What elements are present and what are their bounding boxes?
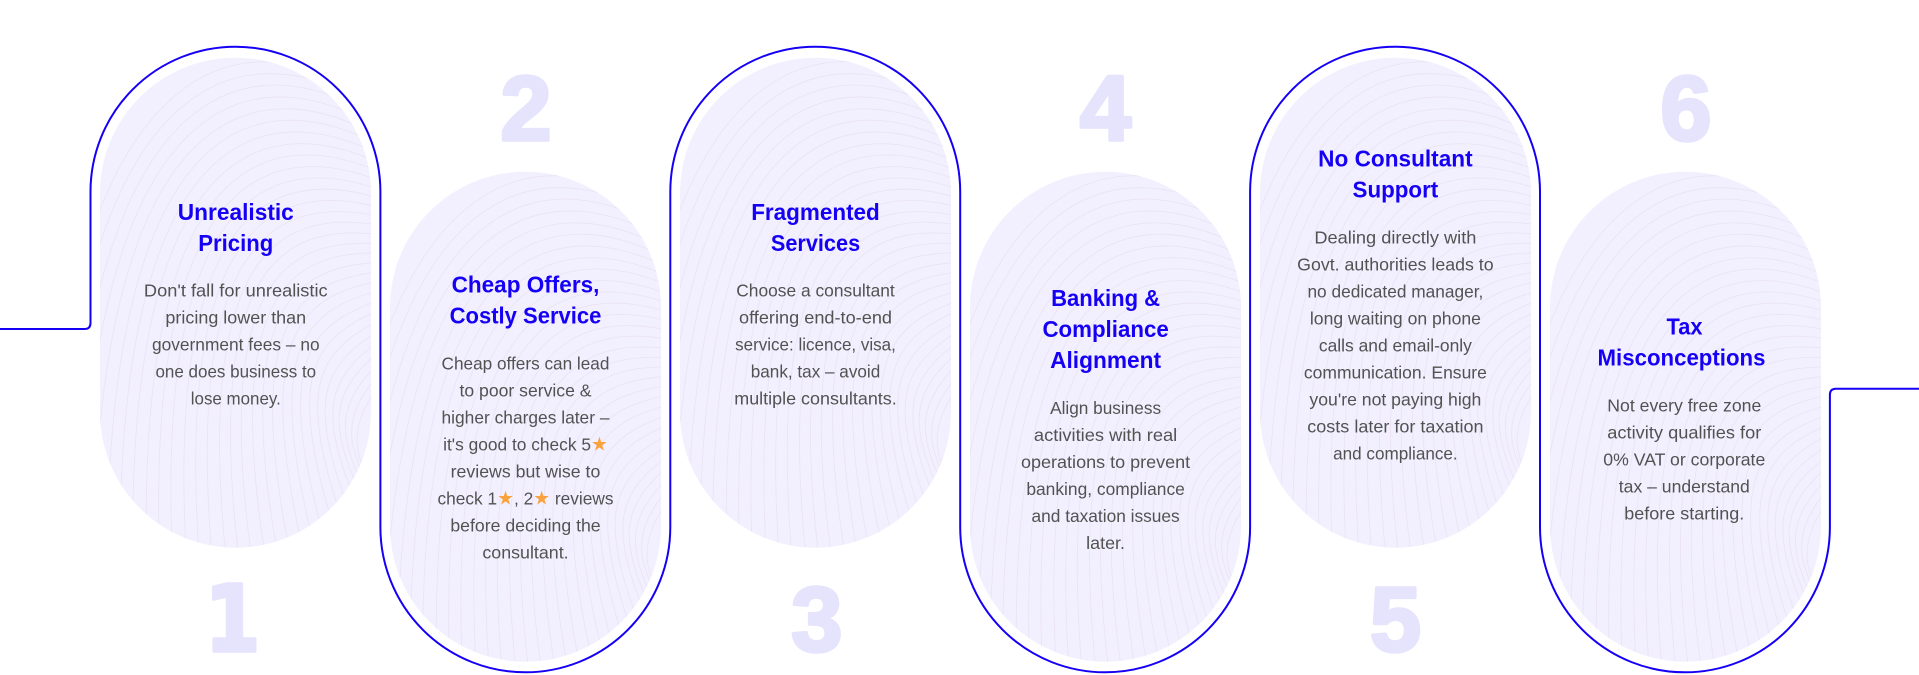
body text 4: and taxation issues — [1032, 506, 1180, 526]
body text 3: service: licence, visa, — [735, 335, 896, 355]
pill background 5 — [1260, 58, 1531, 548]
pill background 3 — [680, 58, 951, 548]
number 4: 4 — [1080, 58, 1131, 160]
body text 5: Govt. authorities leads to — [1297, 255, 1494, 275]
body text 5: no dedicated manager, — [1307, 282, 1483, 302]
body text 2: consultant. — [482, 543, 569, 563]
heading: banking and compliance alignment: Banking & — [1051, 285, 1160, 311]
heading: fragmented services — [751, 199, 880, 256]
heading: unrealistic pricing: Pricing — [198, 230, 273, 256]
body text 5: communication. Ensure — [1304, 363, 1487, 383]
panel: step 5 no consultant support — [1260, 58, 1531, 654]
body text 1: government fees – no — [152, 335, 320, 355]
body text 6: before starting. — [1624, 503, 1744, 523]
body text 4 — [1021, 398, 1190, 553]
body text 6: Not every free zone — [1607, 395, 1761, 415]
body text 5: costs later for taxation — [1307, 417, 1484, 437]
pill background 6 — [1550, 172, 1821, 662]
heading: unrealistic pricing: Unrealistic — [178, 199, 294, 225]
number 5: 5 — [1370, 569, 1421, 671]
panel: step 4 banking and compliance — [970, 74, 1241, 662]
body text 2: before deciding the — [450, 516, 601, 536]
heading: no consultant support: No Consultant — [1318, 146, 1473, 172]
body text 5: you're not paying high — [1309, 390, 1481, 410]
heading: no consultant support — [1318, 146, 1473, 203]
heading: cheap offers costly service: Cheap Offers, — [452, 272, 599, 298]
number 2: 2 — [500, 58, 552, 160]
body text 2: it's good to check 5★ — [443, 434, 608, 456]
body text 3: Choose a consultant — [736, 281, 895, 301]
body text 1: Don't fall for unrealistic — [144, 281, 328, 301]
heading: tax misconceptions: Tax — [1666, 313, 1703, 339]
body text 5: Dealing directly with — [1314, 228, 1476, 248]
body text 2: Cheap offers can lead — [442, 354, 609, 374]
pill background 2 — [390, 172, 661, 662]
heading: unrealistic pricing — [178, 199, 294, 256]
panel: step 2 cheap offers — [390, 74, 661, 662]
panel: step 6 tax misconceptions — [1550, 74, 1821, 662]
body text 6: activity qualifies for — [1607, 422, 1761, 442]
body text 6 — [1603, 395, 1765, 523]
body text 2: reviews but wise to — [451, 462, 600, 482]
body text 5: and compliance. — [1333, 444, 1458, 464]
body text 1: pricing lower than — [165, 308, 306, 328]
heading: cheap offers costly service — [450, 272, 601, 329]
body text 5: calls and email-only — [1319, 336, 1472, 356]
body text 1: lose money. — [191, 389, 281, 409]
body text 5: long waiting on phone — [1310, 309, 1481, 329]
body text 3 — [734, 281, 897, 409]
panel: step 1 unrealistic pricing — [100, 58, 371, 653]
number 1: 1 — [204, 566, 260, 673]
body text 6: 0% VAT or corporate — [1603, 449, 1765, 469]
heading: banking and compliance alignment — [1042, 285, 1169, 373]
body text 1: one does business to — [155, 362, 316, 382]
pill background 1 — [100, 58, 371, 548]
body text 1 — [144, 281, 328, 409]
heading: banking and compliance alignment: Alignment — [1050, 347, 1161, 373]
body text 3: bank, tax – avoid — [751, 362, 880, 382]
heading: cheap offers costly service: Costly Service — [450, 303, 601, 329]
heading: tax misconceptions — [1598, 313, 1765, 370]
body text 3: multiple consultants. — [734, 389, 897, 409]
body text 5 — [1297, 228, 1494, 464]
body text 4: banking, compliance — [1026, 479, 1185, 499]
heading: tax misconceptions: Misconceptions — [1598, 344, 1765, 370]
body text 4: operations to prevent — [1021, 452, 1190, 472]
number 6: 6 — [1660, 58, 1712, 160]
body text 2: check 1★, 2★ reviews — [438, 488, 614, 510]
body text 4: Align business — [1050, 398, 1161, 418]
body text 4: activities with real — [1034, 425, 1177, 445]
pill background 4 — [970, 172, 1241, 662]
heading: fragmented services: Services — [771, 230, 860, 256]
body text 3: offering end-to-end — [739, 308, 892, 328]
number 3: 3 — [791, 569, 842, 671]
body text 2 — [438, 354, 614, 563]
body text 2: higher charges later – — [442, 408, 610, 428]
heading: fragmented services: Fragmented — [751, 199, 880, 225]
heading: banking and compliance alignment: Compliance — [1042, 316, 1169, 342]
body text 6: tax – understand — [1619, 476, 1750, 496]
heading: no consultant support: Support — [1353, 177, 1439, 203]
panel: step 3 fragmented services — [680, 58, 951, 654]
body text 4: later. — [1086, 533, 1125, 553]
body text 2: to poor service & — [460, 381, 592, 401]
